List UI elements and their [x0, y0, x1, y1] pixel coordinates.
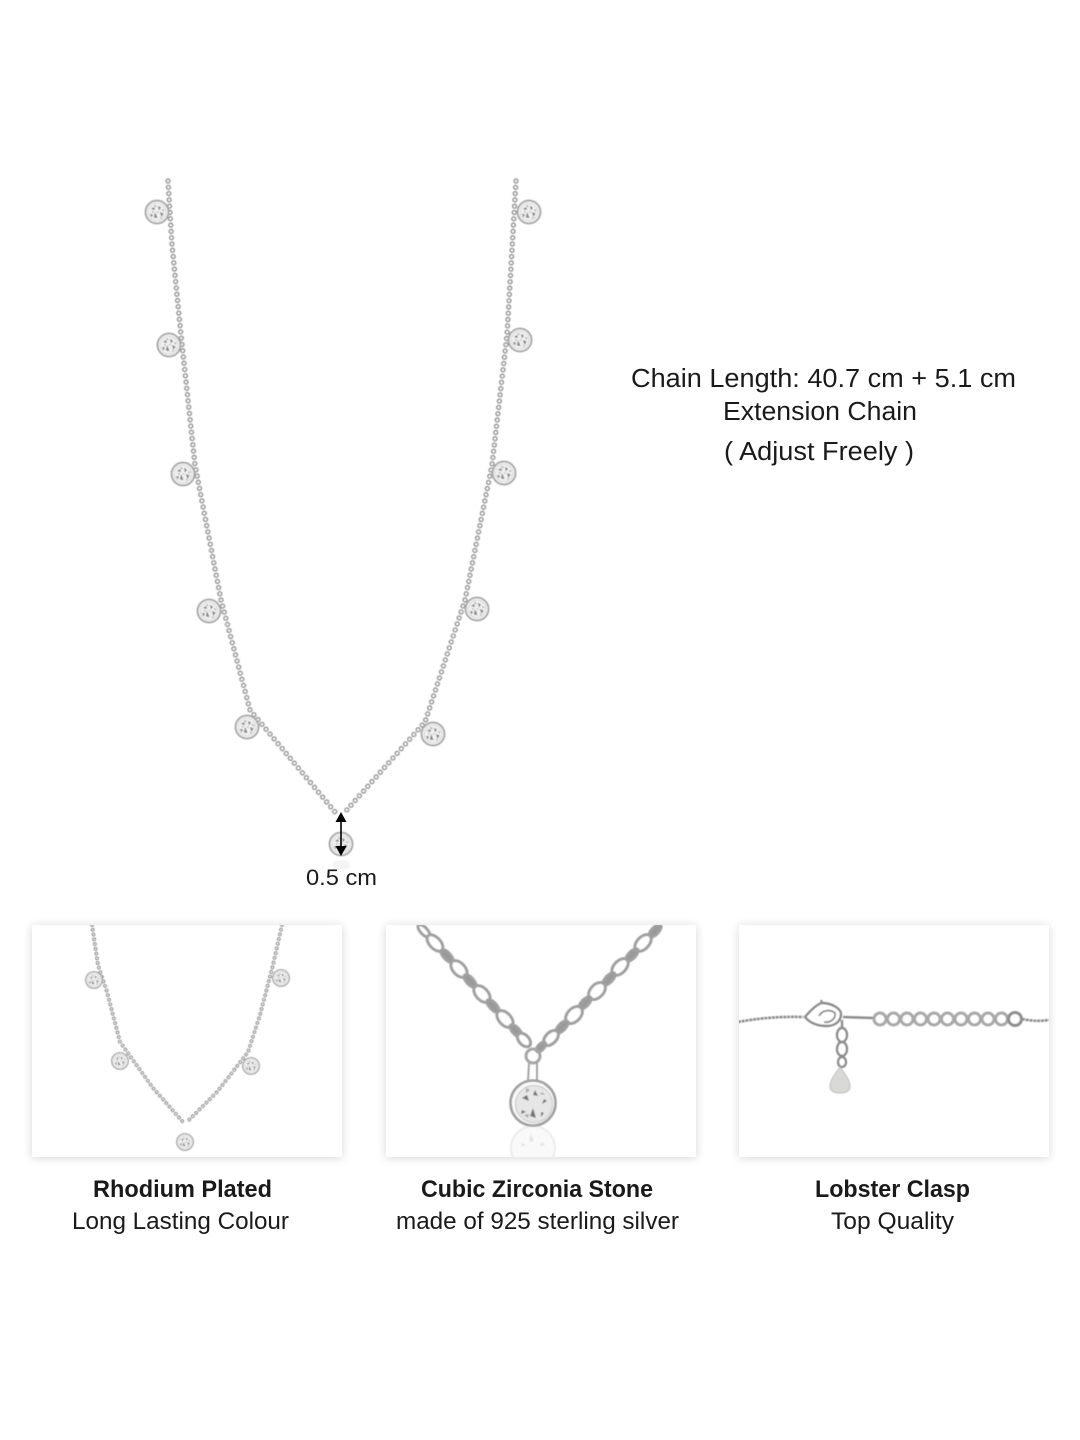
panel: rhodium plated photo: [32, 925, 342, 1157]
right chain links: [535, 923, 663, 1053]
caption: rhodium plated: Rhodium Plated: [93, 1176, 272, 1203]
caption: rhodium plated: [72, 1176, 289, 1235]
reflection: [511, 1126, 555, 1170]
right pendants: [422, 200, 540, 746]
chain: [92, 925, 282, 1122]
left chain: [168, 181, 335, 812]
panel: lobster clasp photo: [739, 925, 1049, 1157]
bail: [526, 1049, 540, 1081]
caption: cubic zirconia stone: Cubic Zirconia Stone: [421, 1176, 653, 1203]
size label: 0.5 cm: [306, 865, 377, 890]
caption: lobster clasp: Top Quality: [831, 1208, 954, 1235]
caption: cubic zirconia stone: [396, 1176, 679, 1235]
caption: lobster clasp: [815, 1176, 970, 1235]
right chain: [345, 181, 516, 812]
chain length text block: [631, 365, 1016, 466]
pendants: [86, 970, 289, 1150]
center pendant: [330, 832, 352, 870]
charm tag: [830, 1067, 850, 1093]
caption: lobster clasp: Lobster Clasp: [815, 1176, 970, 1203]
connector: [843, 1017, 873, 1018]
captions: [72, 1176, 970, 1235]
large stone: [510, 1080, 556, 1126]
panel: cubic zirconia photo: [386, 925, 696, 1157]
extension rings: [874, 1012, 1022, 1026]
left chain: [738, 1017, 803, 1022]
left pendants: [146, 200, 258, 738]
chain length text block: Extension Chain: [723, 398, 917, 426]
chain length text block: Chain Length: 40.7 cm + 5.1 cm: [631, 365, 1016, 393]
lobster clasp: [805, 1000, 841, 1026]
caption: rhodium plated: Long Lasting Colour: [72, 1208, 289, 1235]
necklace illustration: [144, 178, 542, 890]
measurement arrow: [336, 812, 346, 856]
left chain links: [416, 923, 533, 1049]
chain length text block: ( Adjust Freely ): [724, 438, 914, 466]
caption: cubic zirconia stone: made of 925 sterling silver: [396, 1208, 679, 1235]
hanging links: [837, 1020, 847, 1067]
right chain: [1022, 1019, 1049, 1021]
